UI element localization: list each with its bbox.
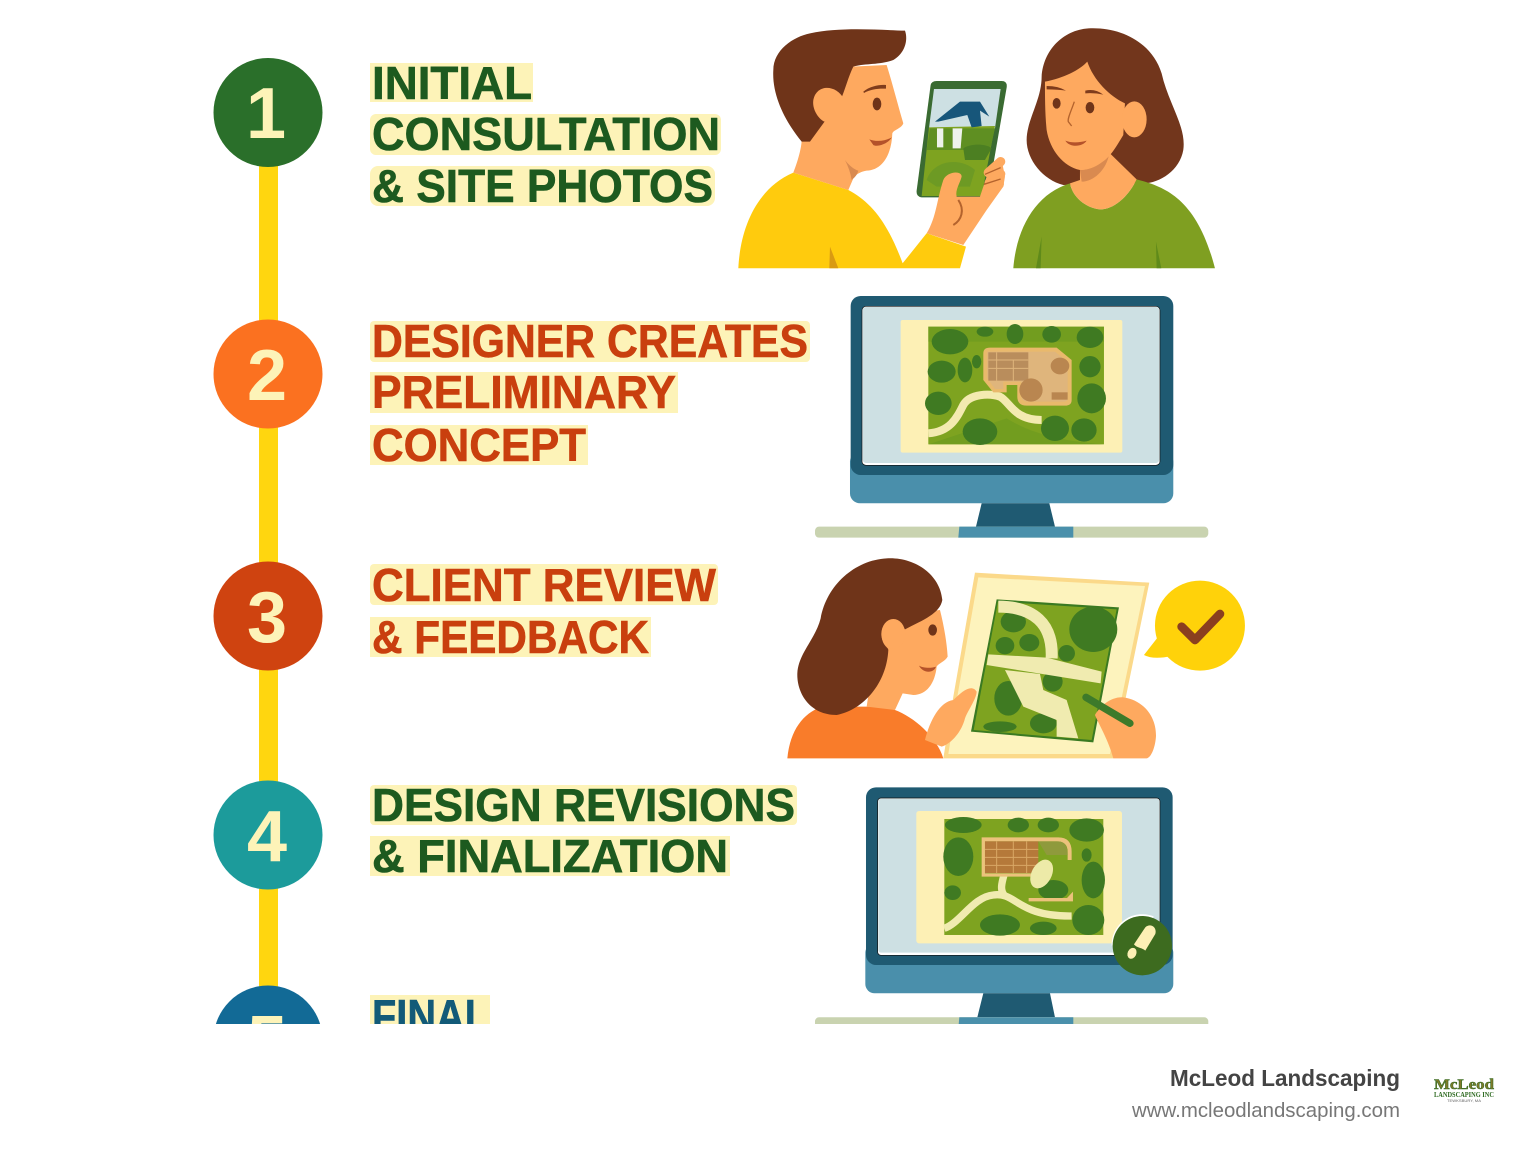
hand holding phone — [927, 160, 1005, 245]
footer website: www.mcleodlandscaping.com — [1131, 1099, 1400, 1122]
step 1 heading: INITIAL — [372, 57, 532, 109]
monitor frame — [815, 296, 1208, 538]
step 3 heading: CLIENT REVIEW — [372, 559, 717, 611]
footer logo: McLeod — [1434, 1077, 1495, 1093]
step 4 heading: DESIGN REVISIONS — [372, 779, 795, 831]
step 2 heading — [370, 315, 810, 471]
step 5 number badge — [216, 986, 320, 1024]
site plan — [901, 320, 1122, 453]
timeline connector — [259, 160, 278, 990]
illustration: client reviewing plan — [787, 558, 1245, 758]
badge: edit marker — [1113, 915, 1172, 975]
step 3 heading: & FEEDBACK — [372, 611, 649, 663]
step 1 number badge: 1 — [246, 74, 286, 154]
phone with site photo — [917, 81, 1007, 197]
woman in profile — [787, 558, 948, 758]
step 1 heading: CONSULTATION — [372, 108, 720, 160]
illustration: man showing site photo to woman — [738, 28, 1215, 268]
step 4 number badge: 4 — [247, 797, 287, 877]
step 5 heading: FINAL — [372, 990, 489, 1042]
step 3 number badge: 3 — [247, 578, 287, 658]
step 5 heading — [370, 995, 490, 1024]
man — [738, 29, 966, 268]
monitor frame — [815, 787, 1208, 1028]
revised site plan — [916, 811, 1122, 943]
step 4 heading — [370, 785, 797, 876]
speech bubble with checkmark — [1144, 581, 1245, 671]
step 3 number badge — [214, 562, 322, 670]
step 2 heading: CONCEPT — [372, 419, 586, 471]
step 1 heading — [370, 57, 721, 212]
hands and pencil — [925, 688, 1156, 758]
step 4 heading: & FINALIZATION — [372, 830, 728, 882]
plan sheet — [943, 573, 1149, 758]
step 1 heading: & SITE PHOTOS — [372, 160, 713, 212]
footer logo: TEWKSBURY, MA — [1447, 1098, 1481, 1103]
step 2 number badge — [214, 320, 322, 428]
timeline and step content — [214, 28, 1245, 1094]
step 1 number badge — [214, 58, 322, 167]
step 2 number badge: 2 — [247, 336, 287, 416]
step 3 heading — [370, 564, 718, 657]
step 5 number badge: 5 — [247, 1002, 287, 1082]
footer brand name: McLeod Landscaping — [1170, 1065, 1400, 1091]
illustration: monitor with preliminary concept — [815, 296, 1208, 538]
step 4 number badge — [214, 780, 322, 890]
footer logo — [1434, 1077, 1495, 1103]
footer logo: LANDSCAPING INC — [1434, 1090, 1494, 1099]
step 2 heading: DESIGNER CREATES — [372, 315, 808, 367]
step 2 heading: PRELIMINARY — [372, 366, 676, 418]
illustration: monitor with final design — [815, 787, 1208, 1028]
woman — [1013, 28, 1215, 268]
